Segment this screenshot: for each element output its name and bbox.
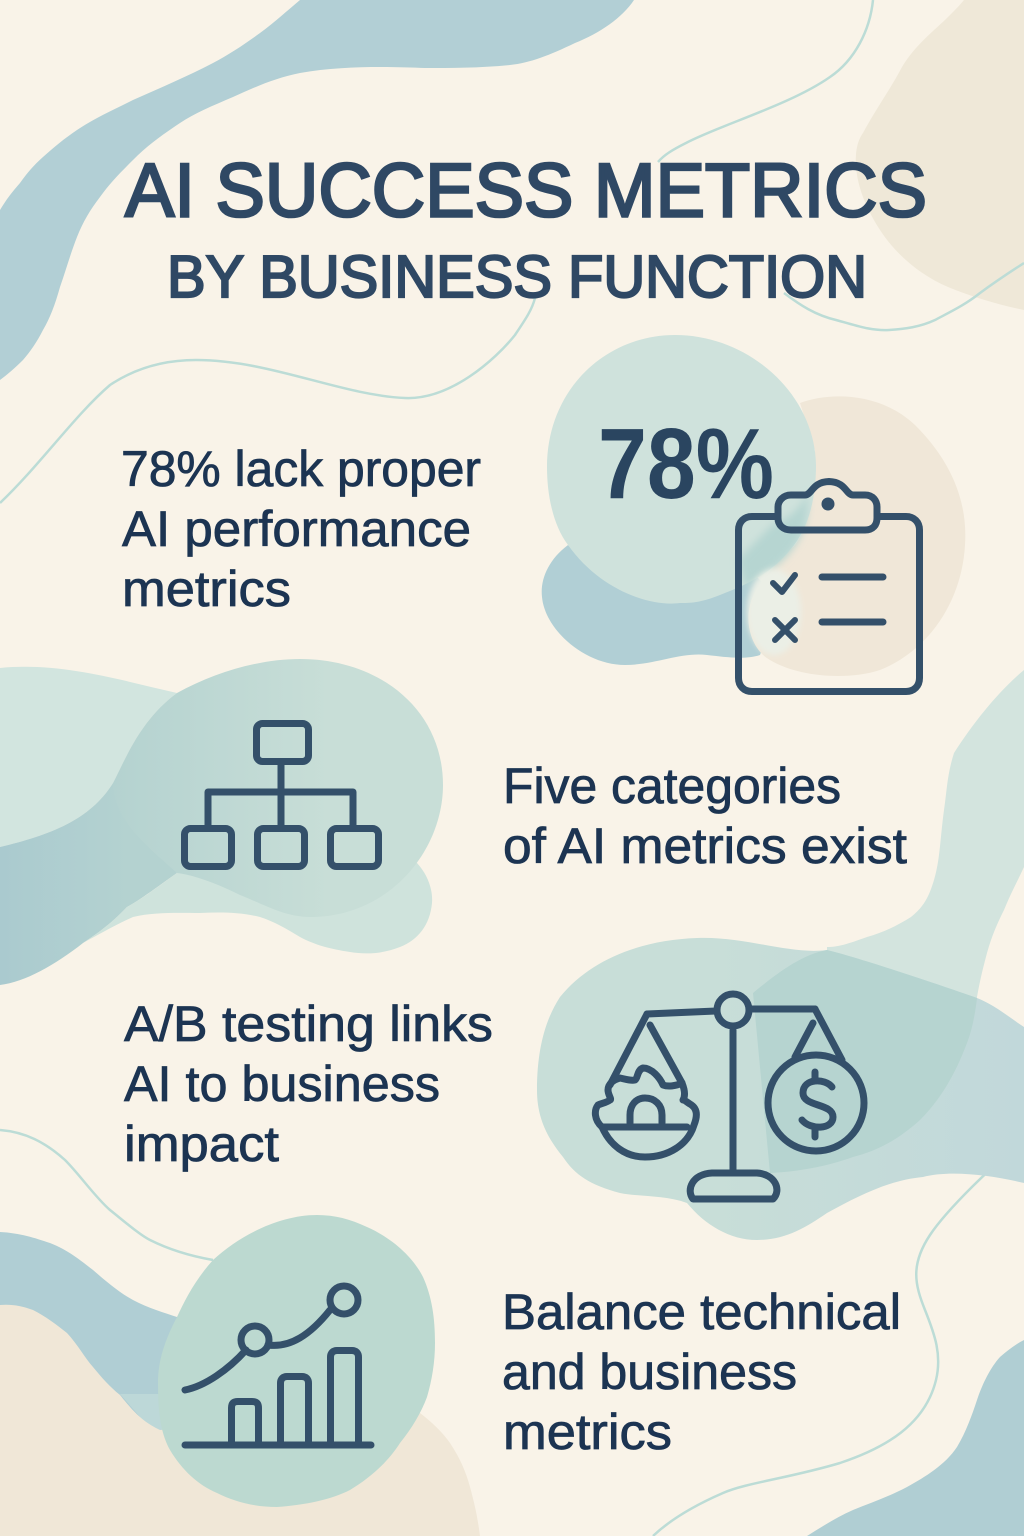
text block: balance: and business bbox=[502, 1344, 797, 1400]
text block: A/B testing: impact bbox=[124, 1116, 279, 1172]
stat: 78%: 78% bbox=[598, 408, 774, 520]
text block: 78% lack metrics: metrics bbox=[122, 561, 291, 617]
text block: five categories: of AI metrics exist bbox=[503, 818, 907, 874]
title line 1: AI SUCCESS METRICS bbox=[125, 148, 927, 234]
icon: balance scale bbox=[595, 994, 864, 1199]
text block: balance bbox=[502, 1284, 901, 1460]
text block: five categories: Five categories bbox=[503, 758, 841, 814]
icon: hierarchy bbox=[184, 724, 378, 866]
blob group: scale row bbox=[537, 938, 1024, 1240]
icon: clipboard bbox=[738, 482, 920, 692]
title bbox=[125, 148, 927, 310]
blob: chart circle bbox=[158, 1215, 435, 1507]
text block: 78% lack metrics: 78% lack proper bbox=[121, 441, 481, 497]
text block: balance: metrics bbox=[503, 1404, 672, 1460]
text block: A/B testing: AI to business bbox=[124, 1056, 440, 1112]
blob group: 78% row bbox=[542, 335, 965, 676]
text block: five categories bbox=[503, 758, 907, 874]
text block: 78% lack metrics bbox=[121, 441, 481, 617]
text block: A/B testing bbox=[124, 996, 493, 1172]
icon: growth chart bbox=[185, 1286, 371, 1445]
text block: A/B testing: A/B testing links bbox=[124, 996, 493, 1052]
title line 2: BY BUSINESS FUNCTION bbox=[167, 244, 867, 310]
text block: balance: Balance technical bbox=[502, 1284, 901, 1340]
text block: 78% lack metrics: AI performance bbox=[122, 501, 471, 557]
